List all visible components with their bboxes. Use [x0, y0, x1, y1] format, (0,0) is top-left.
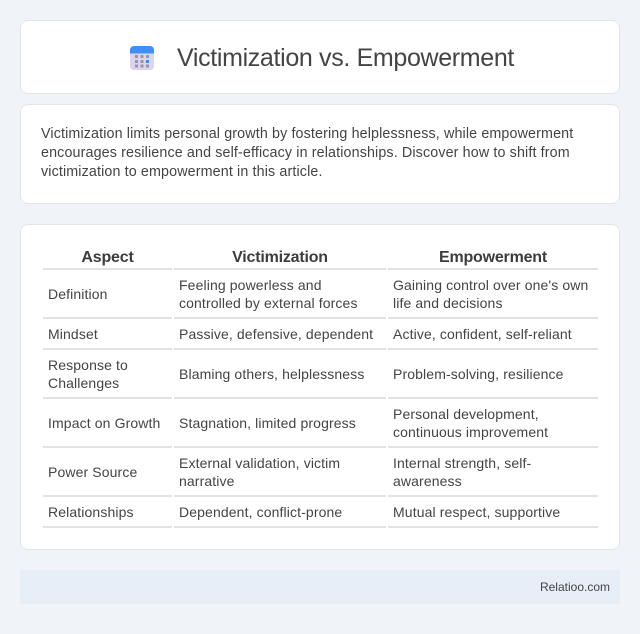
- footer credit: Relatioo.com: [540, 580, 610, 594]
- Definition: Victimization: [179, 277, 358, 311]
- footer bar: [20, 570, 620, 604]
- panel: introduction: [20, 104, 620, 204]
- row: Response to Challenges: Response to: [48, 357, 128, 373]
- Definition: Victimization: controlled by external forces: [179, 295, 358, 311]
- Power Source: Empowerment: Internal strength, self-: [393, 455, 531, 471]
- icon: calendar: [130, 46, 154, 70]
- Power Source: Victimization: narrative: [179, 473, 235, 489]
- Power Source: Victimization: External validation, victim: [179, 455, 340, 471]
- row: Definition: Definition: [48, 286, 108, 302]
- Power Source: Victimization: [179, 455, 340, 489]
- Response: Empowerment: Problem-solving, resilience: [393, 366, 564, 382]
- table header: Empowerment: Empowerment: [439, 249, 547, 266]
- Mindset: Empowerment: Active, confident, self-reliant: [393, 326, 572, 342]
- table header: Victimization: Victimization: [232, 249, 328, 266]
- Response: Victimization: Blaming others, helplessness: [179, 366, 364, 382]
- intro text: encourages resilience and self-efficacy in relationships. Discover how to shift from: [41, 145, 570, 161]
- Impact: Empowerment: continuous improvement: [393, 424, 548, 440]
- row: Relationships: Relationships: [48, 504, 134, 520]
- title: Victimization vs. Empowerment: [177, 44, 514, 72]
- Impact: Empowerment: [393, 406, 548, 440]
- intro text: Victimization limits personal growth by fostering helplessness, while empowerment: [41, 126, 573, 142]
- Impact: Empowerment: Personal development,: [393, 406, 539, 422]
- Definition: Empowerment: [393, 277, 588, 311]
- row: Response to Challenges: [48, 357, 128, 391]
- Relationships: Empowerment: Mutual respect, supportive: [393, 504, 560, 520]
- Relationships: Victimization: Dependent, conflict-prone: [179, 504, 342, 520]
- Power Source: Empowerment: awareness: [393, 473, 462, 489]
- Definition: Empowerment: Gaining control over one's own: [393, 277, 588, 293]
- row: Mindset: Mindset: [48, 326, 98, 342]
- Definition: Empowerment: life and decisions: [393, 295, 503, 311]
- row: Impact on Growth: Impact on Growth: [48, 415, 160, 431]
- intro text: [41, 126, 574, 180]
- Impact: Victimization: Stagnation, limited progress: [179, 415, 356, 431]
- panel: comparison table: [20, 224, 620, 550]
- row: Response to Challenges: Challenges: [48, 375, 119, 391]
- intro text: victimization to empowerment in this article.: [41, 164, 323, 180]
- Power Source: Empowerment: [393, 455, 531, 489]
- row: Power Source: Power Source: [48, 464, 137, 480]
- Mindset: Victimization: Passive, defensive, dependent: [179, 326, 373, 342]
- panel: title header: [20, 20, 620, 94]
- table header: Aspect: Aspect: [81, 249, 134, 266]
- Definition: Victimization: Feeling powerless and: [179, 277, 322, 293]
